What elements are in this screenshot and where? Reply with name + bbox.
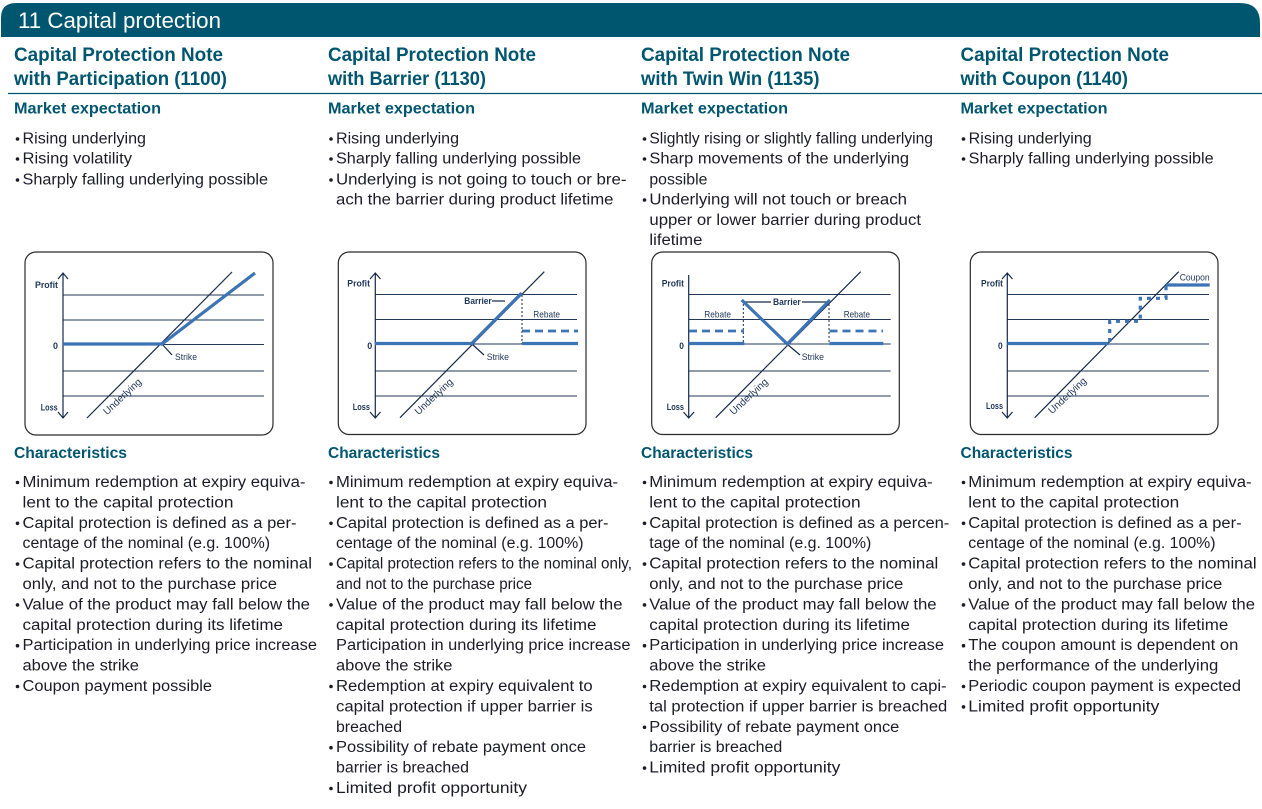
list: characteristics: lent to the capital protection <box>22 494 234 511</box>
payoff chart: barrier: Strike <box>487 352 509 362</box>
heading: 1130: Capital Protection Note <box>328 45 536 66</box>
list: market expectation: lifetime <box>649 232 702 249</box>
list: characteristics: capital protection during its lifetime <box>336 617 596 634</box>
list: characteristics: Minimum redemption at expiry equiva- <box>336 474 618 491</box>
list: characteristics: and not to the purchase price <box>336 576 532 593</box>
list: market expectation: Rising underlying <box>22 130 146 148</box>
column: Capital Protection Note with Coupon <box>960 45 1257 715</box>
list: characteristics: Capital protection is defined as a per- <box>22 515 296 532</box>
list: characteristics: Value of the product may fall below the <box>336 596 622 613</box>
list: characteristics: capital protection if upper barrier is <box>336 698 593 715</box>
payoff chart: coupon: Loss <box>986 401 1003 412</box>
list: characteristics: tal protection if upper barrier is breached <box>649 698 947 715</box>
list: characteristics: The coupon amount is dependent on <box>968 637 1238 654</box>
list: characteristics: barrier is breached <box>336 760 469 777</box>
subheading: market expectation: Market expectation <box>960 100 1108 118</box>
list: characteristics: Value of the product may fall below the <box>649 596 937 613</box>
list: characteristics: Capital protection refers to the nominal <box>22 556 312 573</box>
heading: 1100: Capital Protection Note <box>14 45 223 66</box>
list: characteristics <box>16 474 317 695</box>
payoff chart: coupon: Underlying <box>1046 376 1089 417</box>
list: characteristics: centage of the nominal (e.g. 100%) <box>336 535 584 552</box>
heading: 1140: with Coupon (1140) <box>960 69 1128 90</box>
list: characteristics: Capital protection refers to the nominal only, <box>336 556 632 573</box>
list: characteristics: Limited profit opportunity <box>336 780 527 797</box>
payoff chart: coupon: Profit <box>981 279 1004 290</box>
list: characteristics: barrier is breached <box>649 739 782 756</box>
list: market expectation: Sharply falling underlying possible <box>969 150 1214 168</box>
list: market expectation <box>16 130 268 188</box>
list: characteristics: Participation in underlying price increase <box>336 637 630 654</box>
list: characteristics: Value of the product may fall below the <box>22 596 310 613</box>
payoff chart: coupon <box>970 252 1218 434</box>
payoff chart: twin win <box>652 252 899 434</box>
list: market expectation: ach the barrier during product lifetime <box>336 192 614 208</box>
heading: 1130 <box>327 45 536 90</box>
subheading: market expectation: Market expectation <box>328 100 475 118</box>
payoff chart: participation: Strike <box>175 352 197 362</box>
list: characteristics: Capital protection is defined as a per- <box>336 515 608 532</box>
list: market expectation: Underlying is not going to touch or bre- <box>336 172 626 188</box>
list: characteristics: only, and not to the purchase price <box>649 576 903 593</box>
list: characteristics: Redemption at expiry equivalent to capi- <box>649 678 947 695</box>
list: characteristics: Redemption at expiry equivalent to <box>336 678 593 695</box>
list: market expectation: Sharp movements of the underlying <box>649 150 909 168</box>
list: market expectation: upper or lower barrier during product <box>649 212 922 229</box>
list: market expectation <box>643 130 933 249</box>
list: characteristics: Possibility of rebate payment once <box>649 719 899 736</box>
list: characteristics: Limited profit opportunity <box>968 698 1160 715</box>
list: characteristics: Minimum redemption at expiry equiva- <box>968 474 1252 491</box>
list: characteristics: Value of the product may fall below the <box>968 596 1255 613</box>
list: characteristics: lent to the capital protection <box>336 494 547 511</box>
list: characteristics: Capital protection refers to the nominal <box>649 556 938 573</box>
list: market expectation: Rising underlying <box>336 130 459 148</box>
list: market expectation: Underlying will not touch or breach <box>649 192 907 208</box>
title banner <box>1 3 1260 37</box>
list: characteristics: Participation in underlying price increase <box>649 637 944 654</box>
list: characteristics: Periodic coupon payment is expected <box>968 678 1241 695</box>
heading: 1135 <box>640 45 850 90</box>
list: characteristics: Capital protection is defined as a percen- <box>649 515 949 532</box>
payoff chart: twin win: Rebate <box>704 310 731 320</box>
heading: 1100 <box>13 45 227 90</box>
list: characteristics: Possibility of rebate payment once <box>336 739 586 756</box>
column: Capital Protection Note with Barrier <box>327 45 632 797</box>
list: market expectation <box>329 130 626 208</box>
list: characteristics: centage of the nominal (e.g. 100%) <box>968 535 1216 552</box>
list: market expectation <box>962 130 1214 168</box>
heading: 1140: Capital Protection Note <box>960 45 1169 66</box>
payoff chart: participation: Underlying <box>101 377 144 418</box>
list: characteristics <box>962 474 1257 715</box>
payoff chart: barrier <box>338 252 586 434</box>
payoff chart: twin win: Profit <box>662 279 685 290</box>
heading: 1130: with Barrier (1130) <box>327 69 486 90</box>
heading: 1140 <box>960 45 1169 90</box>
column: Capital Protection Note with Participation <box>13 45 317 695</box>
payoff chart: barrier: Loss <box>353 402 370 413</box>
list: characteristics: Coupon payment possible <box>22 678 212 695</box>
list: market expectation: Rising underlying <box>969 130 1092 148</box>
list: characteristics: above the strike <box>649 658 766 675</box>
list: characteristics <box>643 474 949 777</box>
subheading: market expectation: Market expectation <box>14 100 161 118</box>
heading: 1135: with Twin Win (1135) <box>640 69 820 90</box>
payoff chart: barrier: Rebate <box>533 310 560 320</box>
list: characteristics: capital protection during its lifetime <box>649 617 910 634</box>
payoff chart: barrier: 0 <box>367 341 372 352</box>
list: characteristics: lent to the capital protection <box>968 494 1179 511</box>
subheading: characteristics: Characteristics <box>960 445 1072 462</box>
column: Capital Protection Note with Twin Win <box>640 45 949 777</box>
heading: 1100: with Participation (1100) <box>13 69 227 90</box>
payoff chart: twin win: Barrier <box>773 297 801 308</box>
payoff chart: twin win: Underlying <box>728 377 771 418</box>
title banner: 11 Capital protection <box>18 8 221 33</box>
payoff chart: participation <box>25 252 273 435</box>
payoff chart: participation: Profit <box>35 280 59 291</box>
list: characteristics: Limited profit opportunity <box>649 760 841 777</box>
list: market expectation: Sharply falling underlying possible <box>336 150 581 168</box>
list: characteristics: the performance of the underlying <box>968 658 1218 675</box>
payoff chart: twin win: Loss <box>667 402 684 413</box>
subheading: characteristics: Characteristics <box>14 445 127 462</box>
list: characteristics: tage of the nominal (e.g. 100%) <box>649 535 871 552</box>
payoff chart: twin win: 0 <box>679 341 684 352</box>
payoff chart: coupon: Coupon <box>1180 273 1210 283</box>
list: market expectation: possible <box>649 172 707 188</box>
list: characteristics: breached <box>336 719 402 736</box>
payoff chart: barrier: Profit <box>347 279 371 290</box>
payoff chart: barrier: Underlying <box>413 377 456 418</box>
list: characteristics: centage of the nominal (e.g. 100%) <box>22 535 270 552</box>
list: characteristics: Capital protection refers to the nominal <box>968 556 1257 573</box>
payoff chart: participation: Loss <box>41 403 58 414</box>
list: characteristics: capital protection during its lifetime <box>968 617 1228 634</box>
list: market expectation: Rising volatility <box>22 150 132 168</box>
list: market expectation: Sharply falling underlying possible <box>22 172 268 188</box>
list: characteristics: Minimum redemption at expiry equiva- <box>22 474 306 491</box>
payoff chart: twin win: Strike <box>802 352 824 362</box>
list: characteristics: only, and not to the purchase price <box>22 576 277 593</box>
subheading: characteristics: Characteristics <box>641 445 753 462</box>
list: characteristics: Minimum redemption at expiry equiva- <box>649 474 933 491</box>
list: characteristics: capital protection during its lifetime <box>22 617 283 634</box>
list: characteristics <box>329 474 632 797</box>
list: market expectation: Slightly rising or slightly falling underlying <box>649 130 933 148</box>
payoff chart: barrier: Barrier <box>464 296 492 307</box>
list: characteristics: Participation in underlying price increase <box>22 637 317 654</box>
payoff chart: twin win: Rebate <box>844 310 870 320</box>
list: characteristics: lent to the capital protection <box>649 494 861 511</box>
payoff chart: coupon: 0 <box>998 341 1003 352</box>
payoff chart: participation: 0 <box>53 341 58 352</box>
list: characteristics: above the strike <box>22 658 139 675</box>
list: characteristics: above the strike <box>336 658 452 675</box>
list: characteristics: Capital protection is defined as a per- <box>968 515 1242 532</box>
list: characteristics: only, and not to the purchase price <box>968 576 1222 593</box>
heading: 1135: Capital Protection Note <box>641 45 850 66</box>
subheading: characteristics: Characteristics <box>328 445 440 462</box>
subheading: market expectation: Market expectation <box>641 100 788 118</box>
